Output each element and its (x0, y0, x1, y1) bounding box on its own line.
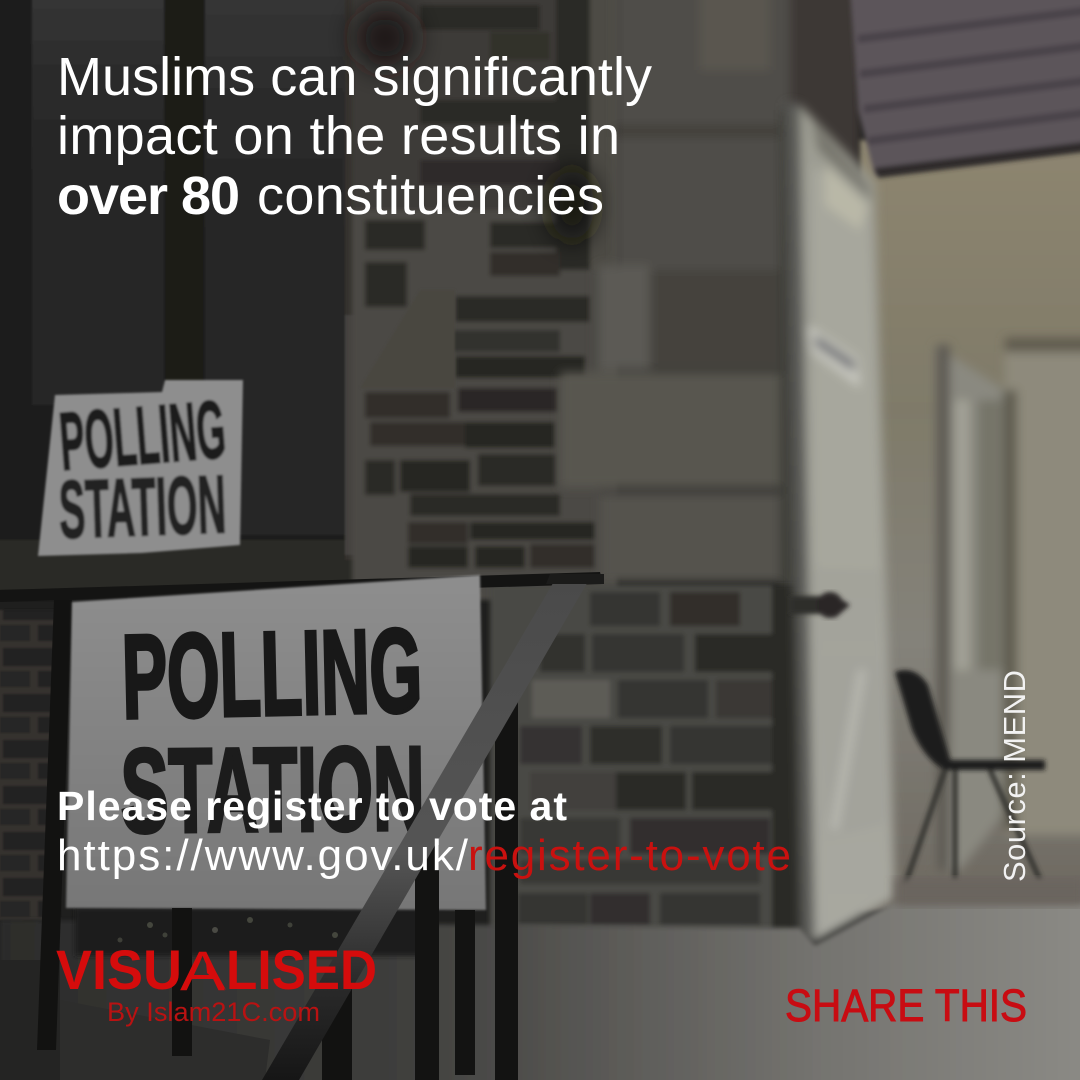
small polling station poster (38, 380, 243, 556)
left dark window panes (0, 0, 395, 600)
flower bed (75, 908, 420, 956)
heading: impact on the results in (57, 106, 620, 166)
source note: Source: MEND (997, 670, 1032, 882)
logo: Visualised by Islam21C.com: A (180, 939, 226, 1002)
large polling station sign: POLLING (121, 604, 424, 744)
call to action: register to vote: Please register to vote at (57, 783, 567, 829)
heading: constituencies (257, 166, 604, 226)
stone pillar (560, 0, 860, 940)
black chair (895, 670, 1045, 885)
buttress (360, 290, 455, 388)
metal rail behind sign (0, 572, 603, 602)
right wall (860, 140, 1080, 910)
call to action: register to vote: register-to-vote (468, 831, 791, 880)
heading: Muslims can significantly (57, 47, 652, 107)
large polling station sign: STATION (120, 722, 425, 858)
call to action: register to vote (57, 783, 791, 880)
stone brick wall (352, 0, 620, 600)
logo: Visualised by Islam21C.com: By Islam21C.com (107, 997, 320, 1027)
dark shadow blobs on wall (355, 8, 594, 241)
roller shutter (850, 0, 1080, 178)
main open door (785, 103, 895, 945)
call to action: register to vote: https://www.gov.uk/ (57, 831, 469, 880)
heading: over 80 (57, 166, 240, 226)
door handle (790, 592, 850, 618)
logo: Visualised by Islam21C.com: VISU (56, 938, 182, 1001)
inner doorway and door (935, 338, 1080, 870)
large polling station sign (66, 575, 486, 910)
logo: Visualised by Islam21C.com (56, 938, 377, 1027)
pavement (0, 878, 1080, 1080)
heading (57, 47, 652, 226)
small polling station poster: STATION (57, 459, 228, 556)
left sign post (37, 600, 72, 1050)
small polling station poster: POLLING (56, 384, 229, 488)
logo: Visualised by Islam21C.com: LISED (226, 938, 377, 1001)
lower brick wall (490, 585, 808, 930)
share this label: SHARE THIS (785, 980, 1027, 1031)
stair railing and balusters (172, 574, 604, 1080)
left lower bricks (0, 610, 60, 920)
